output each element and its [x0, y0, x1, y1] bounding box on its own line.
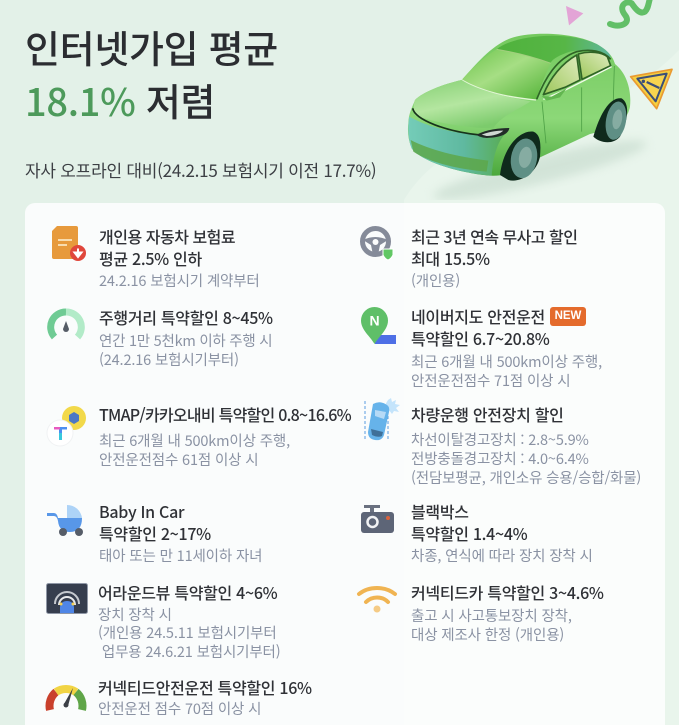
item: mileage discount: 주행거리 특약할인 8~45% [99, 305, 273, 329]
rear wheel [593, 98, 627, 142]
item: black box: 특약할인 1.4~4% [411, 521, 527, 545]
item: connected safe driving [98, 675, 312, 719]
title: 18.1% 저렴 [25, 72, 215, 127]
item: connected car: 출고 시 사고통보장치 장착, [411, 604, 572, 626]
item: baby in car [99, 499, 262, 566]
item: TMAP / Kakao [99, 402, 352, 470]
item: safety device discount: (전담보평균, 개인소유 승용/승합/화물) [411, 466, 641, 488]
item: mileage discount: (24.2.16 보험시기부터) [99, 348, 239, 370]
subtitle: 자사 오프라인 대비(24.2.15 보험시기 이전 17.7%) [25, 157, 376, 182]
icon: green squiggle [610, 0, 650, 26]
item: safety device discount: 전방충돌경고장치 : 4.0~6.4% [411, 448, 589, 468]
item: mileage discount: 연간 1만 5천km 이하 주행 시 [99, 330, 272, 350]
headlight [477, 128, 509, 138]
item: connected car: 대상 제조사 한정 (개인용) [411, 624, 564, 644]
front fascia [408, 117, 509, 176]
item: personal car premium: 24.2.16 보험시기 계약부터 [99, 270, 260, 291]
title [25, 19, 278, 127]
icon: black box camera [361, 505, 394, 533]
item: connected car: 커넥티드카 특약할인 3~4.6% [411, 580, 604, 604]
icon: car with lane sensors [364, 398, 400, 440]
item: naver map safe driving: 네이버지도 안전운전 [411, 304, 545, 328]
icon: around view monitor [46, 583, 88, 614]
item: no-accident discount: 최근 3년 연속 무사고 할인 [411, 224, 577, 248]
icon: yellow warning triangle [631, 69, 672, 109]
item: no-accident discount: 최대 15.5% [411, 246, 490, 270]
title: 인터넷가입 평균 [25, 19, 278, 74]
windshield [462, 49, 551, 100]
item: connected safe driving: 커넥티드안전운전 특약할인 16% [98, 675, 312, 699]
item: around view: (개인용 24.5.11 보험시기부터 [98, 622, 277, 643]
item: TMAP / Kakao: 안전운전점수 61점 이상 시 [99, 448, 258, 470]
icon: pink triangle [566, 6, 583, 25]
item: naver map safe driving: 안전운전점수 71점 이상 시 [411, 370, 570, 390]
hood [414, 80, 531, 128]
icon: naver map pin [361, 307, 396, 344]
item: naver map safe driving: 최근 6개월 내 500km이상 주행, [411, 350, 602, 372]
badge: new: NEW [555, 310, 581, 322]
item: safety device discount [411, 402, 641, 488]
icon: mileage gauge [47, 308, 85, 340]
item: connected car [411, 580, 604, 644]
illustration: green car with decorations [408, 0, 673, 200]
item: baby in car: Baby In Car [99, 499, 184, 523]
item: personal car premium [99, 224, 260, 291]
item: TMAP / Kakao: TMAP/카카오내비 특약할인 0.8~16.6% [99, 402, 351, 426]
item: safety device discount: 차선이탈경고장치 : 2.8~5.9% [411, 428, 589, 450]
icon: TMAP and Kakao navi [46, 406, 86, 446]
item: personal car premium: 개인용 자동차 보험료 [99, 224, 235, 248]
item: black box [411, 499, 593, 566]
car shadow [430, 130, 650, 210]
item: around view [98, 580, 280, 662]
item: personal car premium: 평균 2.5% 인하 [99, 246, 202, 270]
item: no-accident discount [411, 224, 577, 291]
icon: steering wheel [360, 226, 392, 260]
icon: naver map pin: N [369, 312, 380, 328]
icon: connected driving gauge [46, 685, 86, 711]
item: black box: 블랙박스 [411, 499, 469, 523]
roof [497, 36, 611, 63]
item: no-accident discount: (개인용) [411, 270, 460, 291]
item: around view: 어라운드뷰 특약할인 4~6% [98, 580, 277, 604]
item: connected safe driving: 안전운전 점수 70점 이상 시 [98, 698, 261, 719]
item: safety device discount: 차량운행 안전장치 할인 [411, 402, 564, 426]
badge: new [550, 307, 586, 326]
item: naver map safe driving [411, 304, 602, 390]
icon: wifi [356, 586, 398, 612]
icon: baby stroller [47, 505, 83, 536]
item: mileage discount [99, 305, 273, 370]
item: around view: 업무용 24.6.21 보험시기부터) [102, 640, 280, 662]
item: baby in car: 태아 또는 만 11세이하 자녀 [99, 545, 262, 566]
item: baby in car: 특약할인 2~17% [99, 521, 211, 545]
panel: discount list [25, 203, 665, 725]
item: black box: 차종, 연식에 따라 장치 장착 시 [411, 545, 593, 566]
front wheel [500, 132, 540, 181]
car [408, 34, 630, 181]
door lines [542, 66, 614, 143]
side windows [543, 55, 580, 95]
item: naver map safe driving: 특약할인 6.7~20.8% [411, 326, 550, 350]
item: around view: 장치 장착 시 [98, 604, 172, 624]
icon: orange document [52, 226, 86, 261]
item: TMAP / Kakao: 최근 6개월 내 500km이상 주행, [99, 430, 290, 450]
